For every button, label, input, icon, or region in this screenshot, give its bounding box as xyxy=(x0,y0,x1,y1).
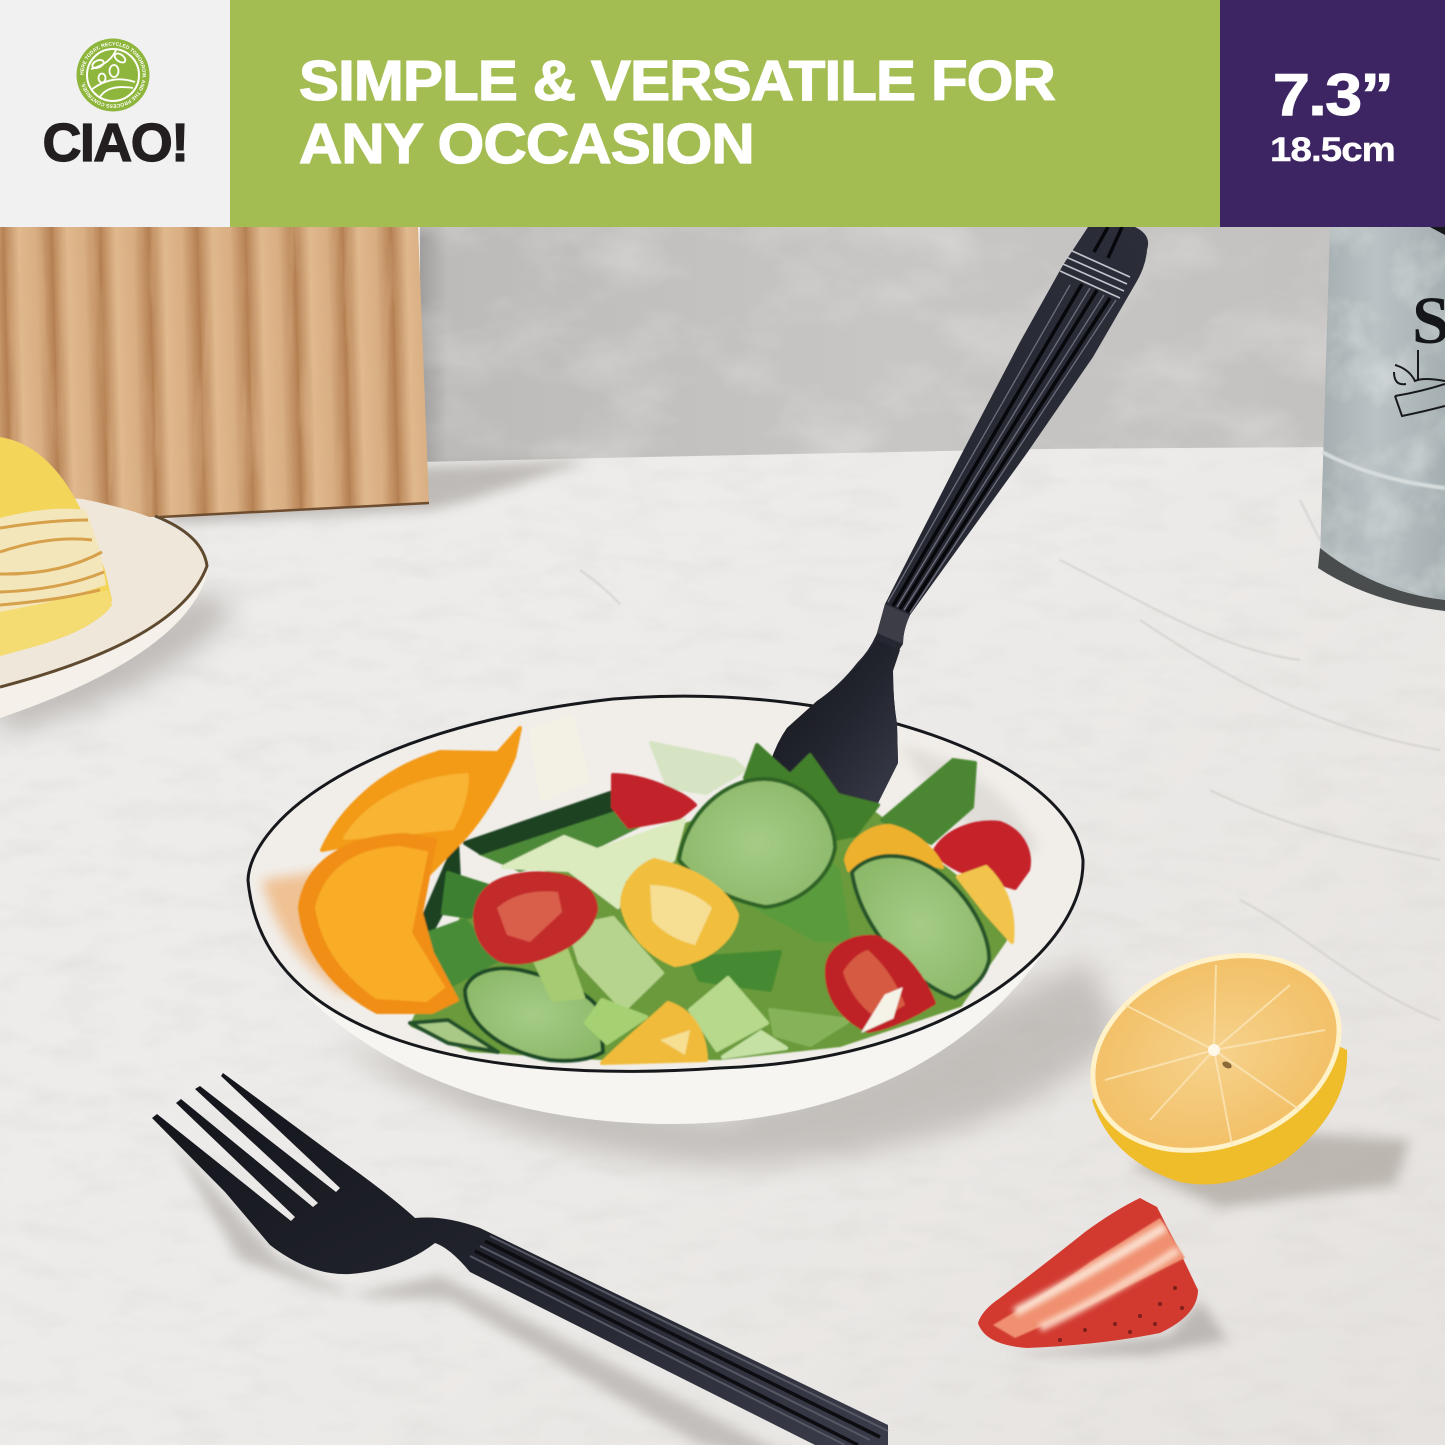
plate shadow xyxy=(0,590,235,735)
title: ANY OCCASION xyxy=(299,112,754,176)
header: purple size panel xyxy=(1220,0,1445,227)
dark cucumber strips xyxy=(465,792,618,853)
cake xyxy=(0,437,112,656)
bowl shadow xyxy=(330,960,1120,1165)
pale back leaves xyxy=(531,717,588,800)
tomato right xyxy=(934,822,1029,888)
metal canister xyxy=(1318,227,1445,612)
strawberry xyxy=(978,1198,1198,1348)
logo badge: HERE TODAY, RECYCLED TOMORROW. AND THE PROCESS CONTINUES. xyxy=(80,42,146,108)
front fork shadow xyxy=(170,1140,815,1445)
strawberry shadow xyxy=(1010,1300,1228,1355)
pale green pieces xyxy=(569,918,662,1010)
plate with cake xyxy=(0,437,208,718)
salad green base xyxy=(412,800,1005,1058)
bowl inner shade xyxy=(900,745,1040,860)
cucumber slices xyxy=(679,779,835,907)
romaine xyxy=(745,745,878,840)
lemon xyxy=(1060,917,1372,1189)
orange glow on bowl xyxy=(262,870,400,995)
title xyxy=(299,49,1056,176)
leaf under strips xyxy=(480,808,640,870)
size centimetres: 18.5cm xyxy=(1270,131,1395,169)
header: logo panel xyxy=(0,0,230,227)
orange slices xyxy=(322,728,520,877)
brand wordmark: CIAO! xyxy=(42,113,187,173)
header: green title band xyxy=(230,0,1220,227)
salad xyxy=(300,717,1029,1063)
board shadow xyxy=(170,460,590,524)
size inches: 7.3” xyxy=(1273,62,1392,128)
red tomato xyxy=(475,873,596,962)
standing fork xyxy=(768,227,1148,805)
title: SIMPLE & VERSATILE FOR xyxy=(299,49,1055,113)
wall xyxy=(420,227,1335,462)
front fork xyxy=(152,1073,888,1445)
wooden board xyxy=(0,227,430,522)
bottom red tomato xyxy=(827,937,934,1031)
white bowl xyxy=(248,696,1083,1124)
lemon shadow xyxy=(1130,1130,1410,1208)
yellow tomato xyxy=(622,860,737,965)
